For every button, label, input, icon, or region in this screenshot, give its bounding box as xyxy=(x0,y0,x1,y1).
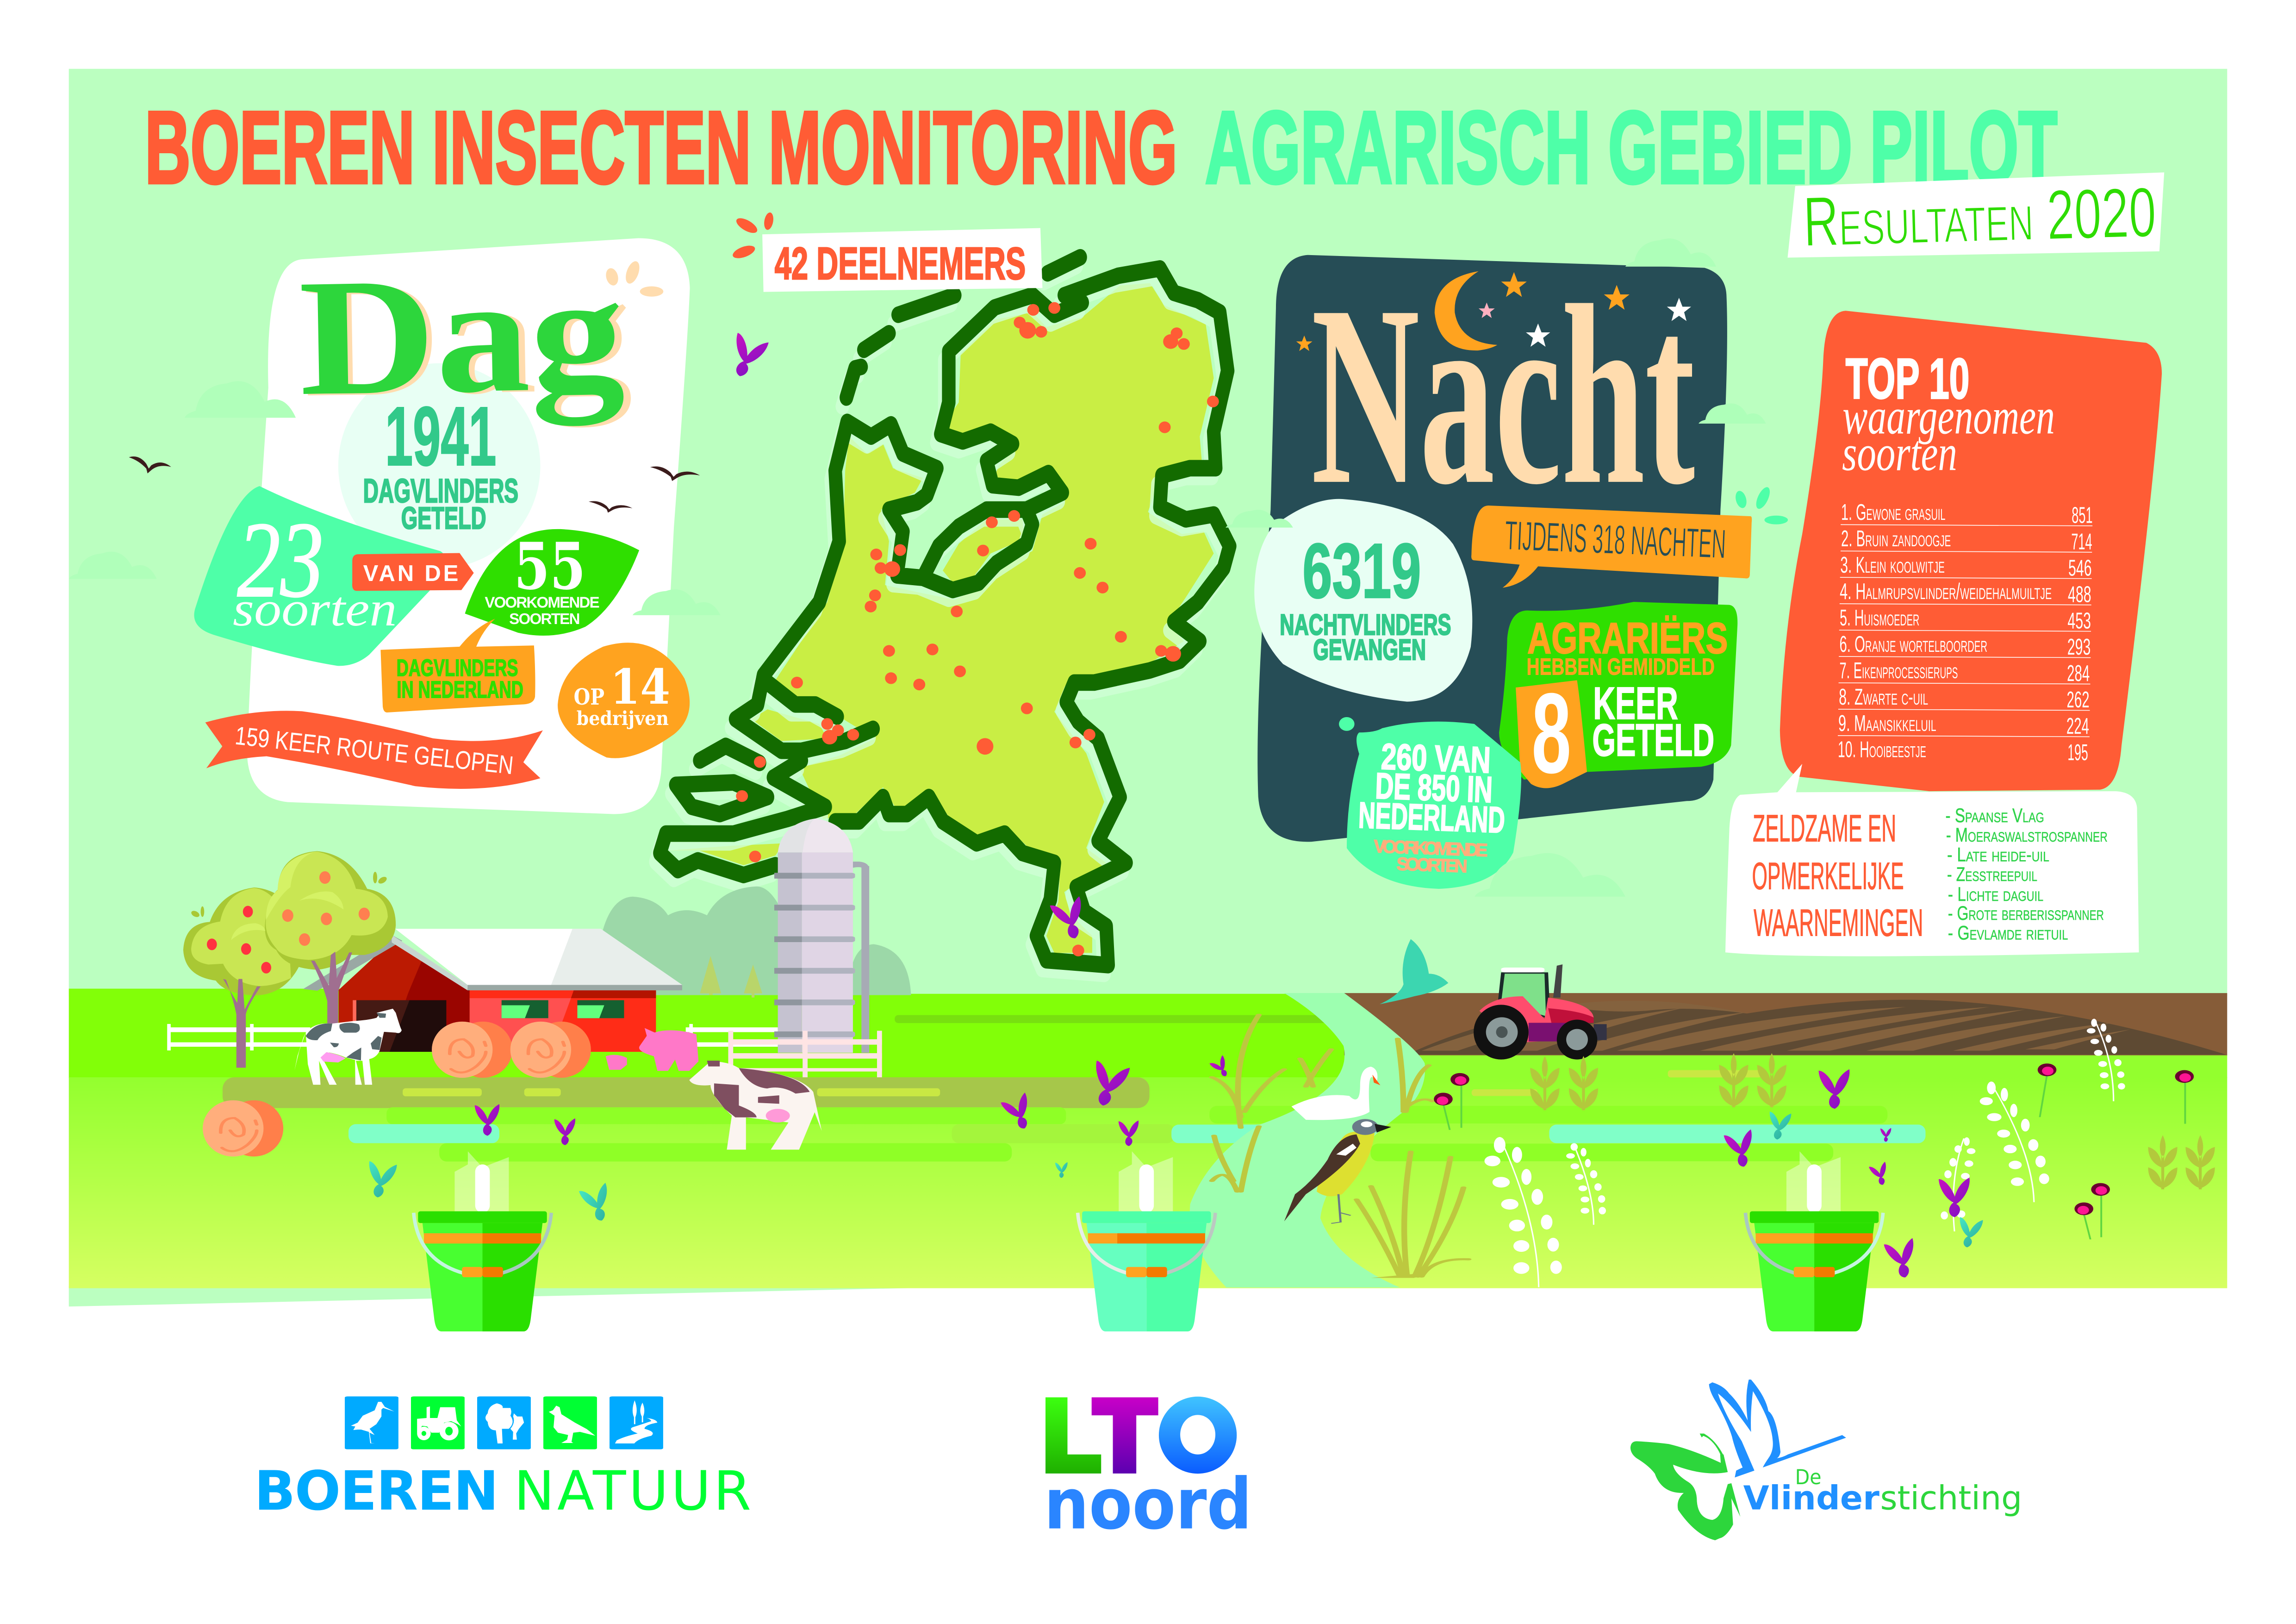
55 leaf xyxy=(465,528,639,636)
cow white and brown xyxy=(689,1061,822,1149)
55 leaf: 55 xyxy=(514,528,586,604)
birds xyxy=(129,456,700,512)
rare species list xyxy=(1946,805,2108,944)
top 10 list: 3. Klein koolwitje xyxy=(1840,553,1945,578)
rare heading: WAARNEMINGEN xyxy=(1754,902,1923,944)
dagvlinders in Nederland callout: DAGVLINDERS xyxy=(397,655,518,681)
silo xyxy=(774,818,869,1053)
tijdens 318 nachten callout: TIJDENS 318 NACHTEN xyxy=(1504,512,1727,567)
buckets with light traps xyxy=(414,1151,1883,1331)
logo text: De xyxy=(1795,1466,1822,1489)
rare sightings panel xyxy=(1725,764,2139,956)
dagvlinders in Nederland callout: IN NEDERLAND xyxy=(397,676,523,703)
right tree crown xyxy=(231,851,396,970)
clouds around Nacht panel xyxy=(1226,238,1766,897)
op 14 bedrijven blob: 14 xyxy=(610,658,670,715)
swan xyxy=(1291,1067,1381,1120)
moon and stars xyxy=(1296,271,1691,351)
logo LTO noord xyxy=(1044,1397,1252,1545)
Nacht panel xyxy=(1254,253,1752,889)
pink fence xyxy=(728,1031,882,1077)
top 10 heading: soorten xyxy=(1842,425,1957,481)
decorative clouds xyxy=(69,552,721,615)
pigs xyxy=(606,1028,698,1071)
cow white and grey xyxy=(294,1009,402,1085)
tijdens 318 nachten callout xyxy=(1471,506,1752,588)
top 10 counts xyxy=(2066,503,2093,765)
top 10 list xyxy=(1838,500,2052,762)
resultaten 2020 banner xyxy=(1787,172,2164,262)
logo BoerenNatuur xyxy=(254,1396,751,1523)
top 10 list: 4. Halmrupsvlinder/weidehalmuiltje xyxy=(1840,579,2052,604)
rare species list: - Spaanse Vlag xyxy=(1946,805,2044,827)
rare species list: - Grote berberisspanner xyxy=(1948,902,2104,924)
rare species list: - Zesstreepuil xyxy=(1947,863,2037,886)
number 8 tag: 8 xyxy=(1531,670,1571,797)
top 10 counts: 284 xyxy=(2067,661,2090,686)
260 van de 850 bubble: DE 850 IN xyxy=(1375,765,1493,810)
flying teal bird xyxy=(1380,939,1448,1004)
logo wordmark: NATUUR xyxy=(514,1459,751,1523)
apple trees xyxy=(183,851,396,1068)
cloud on Dag panel xyxy=(185,381,296,418)
op 14 bedrijven blob: OP xyxy=(574,684,604,710)
bottom left sliver xyxy=(69,1286,937,1306)
barn xyxy=(303,929,682,1052)
wheat plants xyxy=(1530,1053,2215,1189)
hay bale two xyxy=(510,1022,591,1078)
260 van de 850 bubble: SOORTEN xyxy=(1396,854,1468,877)
top 10 heading xyxy=(1842,347,2055,481)
top 10 list: 1. Gewone grasuil xyxy=(1841,500,1946,525)
55 leaf: VOORKOMENDE xyxy=(485,594,600,611)
map of the Netherlands xyxy=(656,257,1230,974)
42 deelnemers label xyxy=(731,212,1042,292)
agrariers box: GETELD xyxy=(1592,715,1714,766)
tree leaves xyxy=(190,872,388,918)
top 10 list: 5. Huismoeder xyxy=(1840,606,1919,631)
23 soorten badge: 23 xyxy=(237,500,324,620)
55 leaf: SOORTEN xyxy=(509,611,580,628)
small pines xyxy=(700,956,762,998)
260 van de 850 bubble xyxy=(1339,717,1521,889)
rare heading: ZELDZAME EN xyxy=(1753,807,1896,849)
rare heading xyxy=(1752,807,1923,944)
top 10 counts: 546 xyxy=(2068,556,2092,581)
Dag heading: Dag xyxy=(298,240,626,433)
6319 bubble: GEVANGEN xyxy=(1313,634,1426,666)
distant hills xyxy=(595,887,911,995)
back white fence xyxy=(167,1024,778,1050)
6319 bubble xyxy=(1254,499,1472,702)
trunks xyxy=(223,952,352,1068)
top 10 list: 10. Hooibeestje xyxy=(1838,737,1926,762)
top 10 counts: 714 xyxy=(2071,529,2092,554)
top 10 counts: 488 xyxy=(2068,582,2091,607)
landscape ground xyxy=(69,989,2227,1288)
top 10 heading: TOP 10 xyxy=(1846,347,1969,411)
route ribbon: 159 KEER ROUTE GELOPEN xyxy=(234,721,515,780)
map outline xyxy=(656,257,1230,974)
1941 butterflies counted: DAGVLINDERS xyxy=(363,472,518,510)
1941 butterflies counted: 1941 xyxy=(385,390,497,483)
farm background and barn xyxy=(167,887,911,1052)
tractor xyxy=(1474,964,1607,1060)
logo De Vlinderstichting xyxy=(1630,1380,2022,1540)
circle 1941 xyxy=(338,363,540,568)
logo wordmark: BOEREN xyxy=(254,1459,499,1523)
Dag sparks xyxy=(604,259,663,297)
top 10 counts: 851 xyxy=(2072,503,2093,528)
hay bales and first cow xyxy=(203,1009,591,1156)
background panel xyxy=(69,69,2227,996)
van de tag xyxy=(352,553,474,591)
rare species list: - Gevlamde rietuil xyxy=(1948,922,2068,944)
logo De Vlinderstichting: Vlinder xyxy=(1743,1479,1879,1518)
agrariers box: KEER xyxy=(1593,678,1678,729)
hay bale three xyxy=(203,1100,283,1156)
resultaten 2020 banner: Resultaten 2020 xyxy=(1802,173,2157,262)
rare species list: - Moeraswalstrospanner xyxy=(1946,824,2108,846)
logo icons xyxy=(345,1396,663,1449)
op 14 bedrijven blob xyxy=(558,643,690,758)
participant dots xyxy=(736,302,1219,956)
logo butterfly xyxy=(1630,1380,1846,1540)
butterflies teal xyxy=(363,1111,1983,1249)
top 10 counts: 262 xyxy=(2067,687,2090,712)
river xyxy=(1190,993,1425,1287)
LTO letters xyxy=(1045,1397,1237,1474)
Dag panel xyxy=(185,238,690,814)
6319 bubble: NACHTVLINDERS xyxy=(1280,609,1451,641)
rare heading: OPMERKELIJKE xyxy=(1752,855,1904,897)
top 10 list: 9. Maansikkeluil xyxy=(1838,711,1936,736)
23 soorten badge: soorten xyxy=(233,581,397,637)
top 10 list: 2. Bruin zandoogje xyxy=(1841,526,1951,551)
wagtail bird xyxy=(1284,1119,1391,1224)
left tree crown xyxy=(183,887,300,995)
label sparks xyxy=(731,212,775,261)
ploughed field furrows xyxy=(1407,999,2226,1055)
agrariers box: AGRARIËRS xyxy=(1527,614,1728,663)
260 van de 850 bubble: NEDERLAND xyxy=(1358,794,1506,841)
top 10 counts: 195 xyxy=(2067,740,2088,765)
23 soorten badge xyxy=(194,486,445,666)
apples xyxy=(207,871,370,974)
op 14 bedrijven blob: bedrijven xyxy=(577,707,669,730)
top 10 heading: waargenomen xyxy=(1842,388,2055,445)
silo, fence, pigs, second cow xyxy=(606,818,882,1149)
number 8 tag xyxy=(1516,670,1587,797)
bucket left xyxy=(414,1151,551,1331)
agrariers box xyxy=(1499,602,1737,797)
noord word: noord xyxy=(1044,1463,1252,1545)
rare species list: - Lichte daguil xyxy=(1948,883,2043,906)
butterflies purple xyxy=(475,331,1970,1280)
top 10 list: 7. Eikenprocessierups xyxy=(1839,658,1958,683)
top 10 counts: 293 xyxy=(2067,635,2091,660)
dagvlinders in Nederland callout xyxy=(380,619,535,712)
1941 butterflies counted xyxy=(363,390,518,536)
6319 bubble: 6319 xyxy=(1302,527,1421,614)
Nacht heading: Nacht xyxy=(1311,253,1697,538)
260 van de 850 bubble: VOORKOMENDE xyxy=(1373,836,1488,861)
field strips xyxy=(223,1015,1926,1162)
white flower stalks xyxy=(1485,1019,2125,1287)
bucket middle xyxy=(1078,1151,1215,1331)
agrariers box: HEBBEN GEMIDDELD xyxy=(1527,653,1715,680)
bucket right xyxy=(1745,1151,1883,1331)
42 deelnemers label: 42 DEELNEMERS xyxy=(775,238,1026,289)
reeds xyxy=(1212,1015,1468,1276)
logo De Vlinderstichting: stichting xyxy=(1880,1479,2022,1518)
top 10 counts: 224 xyxy=(2066,714,2089,739)
top 10 counts: 453 xyxy=(2067,608,2091,633)
1941 butterflies counted: GETELD xyxy=(401,501,486,536)
rare species list: - Late heide-uil xyxy=(1947,843,2049,866)
Dag heading: Dag xyxy=(302,242,633,435)
top 10 list: 8. Zwarte c-uil xyxy=(1839,685,1928,710)
scene right plants and animals xyxy=(1212,939,2194,1287)
tulips xyxy=(1434,1063,2194,1239)
top 10 list: 6. Oranje wortelboorder xyxy=(1839,632,1987,657)
hay bale one xyxy=(432,1022,512,1078)
logo wordmark xyxy=(254,1459,751,1523)
map land fill xyxy=(668,283,1214,953)
van de tag: VAN DE xyxy=(363,561,458,586)
top 10 panel xyxy=(1780,311,2162,791)
260 van de 850 bubble: 260 VAN xyxy=(1381,736,1491,781)
teal sparks xyxy=(1734,485,1788,525)
title: BOEREN INSECTEN MONITORING xyxy=(145,90,1177,205)
